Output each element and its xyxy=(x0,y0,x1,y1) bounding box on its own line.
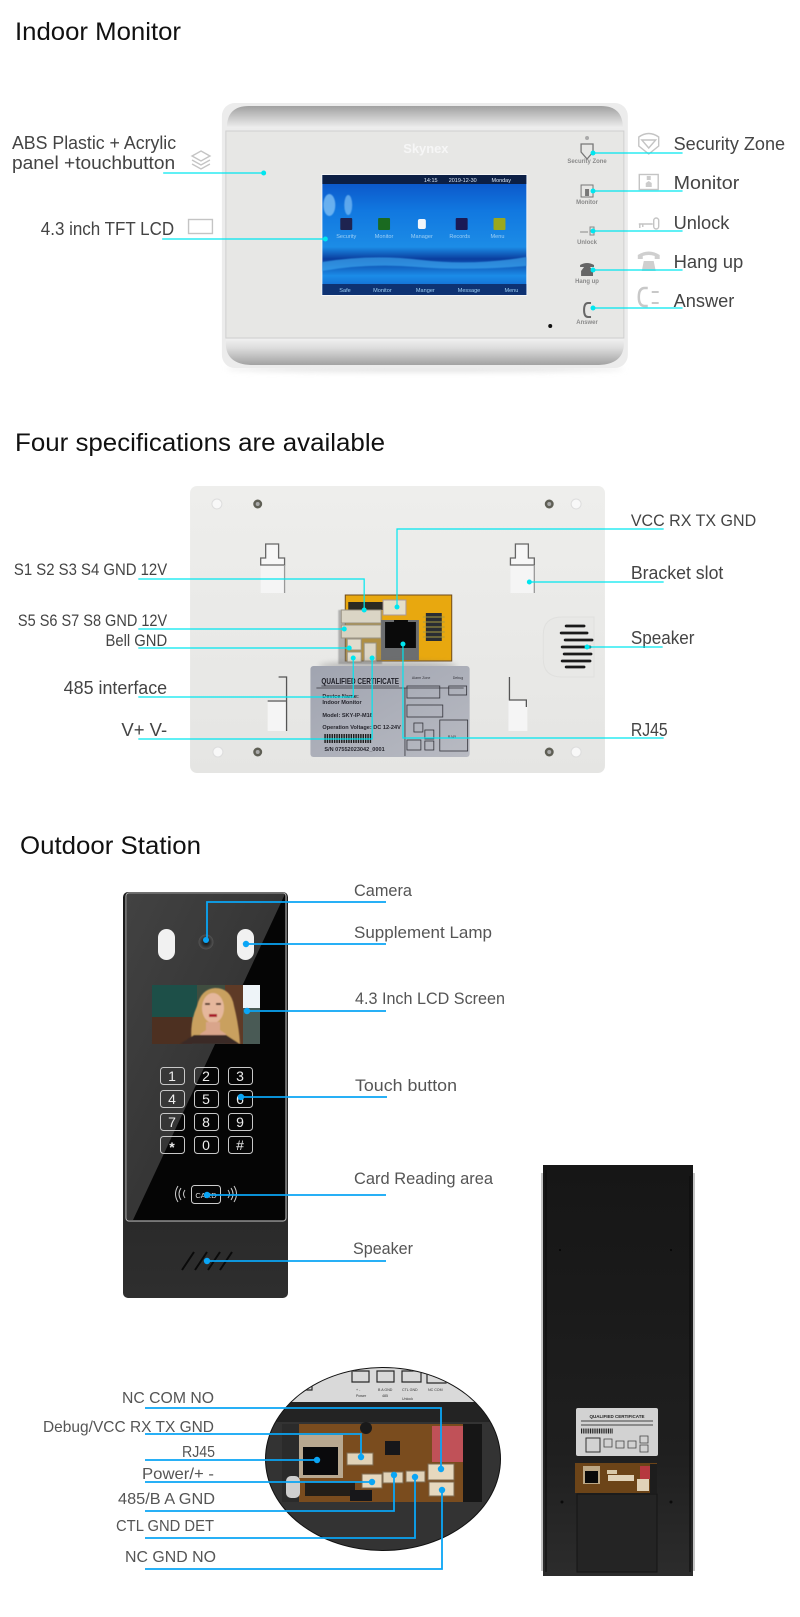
keypad: 7 xyxy=(168,1114,176,1130)
qualified certificate label: Operation Voltage: DC 12-24V xyxy=(322,725,401,731)
callout: NC COM NO xyxy=(122,1390,444,1472)
screws and bumps xyxy=(212,499,581,757)
rear recess xyxy=(577,1494,657,1572)
callout: Touch button: Touch button xyxy=(355,1077,457,1095)
touch buttons: Hang up xyxy=(575,279,599,285)
callout: Card Reading area xyxy=(204,1170,494,1198)
connector legend strip xyxy=(306,1370,447,1400)
connector legend strip: B A GND xyxy=(378,1388,393,1392)
qualified certificate label: S/N 07552023042_0001 xyxy=(324,747,385,753)
callout: Power xyxy=(142,1466,375,1485)
screen: home menu: Monday xyxy=(492,178,511,184)
callout: Hang up xyxy=(591,251,743,272)
callout: Security Zone xyxy=(591,133,785,156)
panel: outdoor station front xyxy=(123,892,288,1298)
qualified certificate label xyxy=(310,661,470,757)
callout: Monitor xyxy=(591,172,739,194)
connector legend strip: CTL GND xyxy=(402,1388,418,1392)
rear label xyxy=(576,1408,658,1456)
brand: Skynex: Skynex xyxy=(403,141,449,156)
callout: NC GND NO xyxy=(125,1487,445,1569)
callout: 485/B A GND: 485/B A GND xyxy=(118,1491,215,1508)
qualified certificate label: Indoor Monitor xyxy=(322,700,362,706)
screen: home menu: Menu xyxy=(504,288,518,294)
keypad: 6 xyxy=(236,1091,244,1107)
callout: Camera: Camera xyxy=(354,882,413,900)
callout: 4.3 Inch LCD Screen xyxy=(244,990,505,1014)
callout: Speaker: Speaker xyxy=(353,1240,413,1258)
keypad: 0 xyxy=(202,1137,210,1153)
PCB connector window xyxy=(338,595,452,664)
title: Outdoor Station: Outdoor Station xyxy=(20,832,201,860)
callout: Bell GND xyxy=(105,631,352,650)
callout: material: panel +touchbutton xyxy=(12,152,175,173)
qualified certificate label: Debug xyxy=(453,676,463,680)
callout: Camera xyxy=(203,882,413,943)
callout: S5 S6 S7 S8 GND 12V xyxy=(18,611,347,632)
qualified certificate label: QUALIFIED CERTIFICATE xyxy=(321,676,399,686)
speaker grille xyxy=(543,617,594,677)
panel: monitor rear xyxy=(190,486,605,773)
callout: Hang up: Hang up xyxy=(674,251,743,272)
callout: Bracket slot: Bracket slot xyxy=(631,562,723,583)
callout: VCC RX TX GND xyxy=(395,511,756,610)
screen: home menu: Manager xyxy=(411,234,433,240)
title: Indoor Monitor: Indoor Monitor xyxy=(15,18,181,46)
callout: Unlock xyxy=(591,212,730,234)
bracket slots xyxy=(261,544,534,731)
callout: 4.3 Inch LCD Screen: 4.3 Inch LCD Screen xyxy=(355,990,505,1008)
connector legend strip: NC COM xyxy=(428,1388,443,1392)
callout: Supplement Lamp xyxy=(243,924,492,947)
qualified certificate label: Alarm Zone xyxy=(412,676,430,680)
callout: material: ABS Plastic + Acrylic xyxy=(12,132,176,153)
callout: Unlock: Unlock xyxy=(674,212,730,233)
card reader xyxy=(176,1186,236,1204)
keypad: 9 xyxy=(236,1114,244,1130)
callout: LCD: 4.3 inch TFT LCD xyxy=(41,218,174,239)
connector legend strip: Power xyxy=(356,1394,367,1398)
screen: home menu: Menu xyxy=(491,234,504,240)
callout: 485/B A GND xyxy=(118,1472,397,1511)
callout: CTL GND DET: CTL GND DET xyxy=(116,1518,214,1535)
callout: VCC RX TX GND: VCC RX TX GND xyxy=(631,511,756,530)
LCD photo of a woman xyxy=(152,985,260,1044)
screen: home menu: Message xyxy=(458,288,480,294)
title: Four specifications: Four specifications are available xyxy=(15,429,385,457)
panel: indoor monitor front xyxy=(222,103,628,372)
callout: Speaker xyxy=(585,627,695,650)
callout: Answer xyxy=(591,288,734,311)
rear label: QUALIFIED CERTIFICATE xyxy=(590,1414,644,1419)
callout: Debug/VCC RX TX GND: Debug/VCC RX TX GND xyxy=(43,1419,214,1436)
screen: home menu: 2019-12-30 xyxy=(449,178,477,184)
callout: Touch button xyxy=(238,1077,457,1100)
screen: home menu: Monitor xyxy=(375,234,393,240)
callout: Speaker xyxy=(204,1240,413,1264)
connector legend strip: Unlock xyxy=(402,1397,413,1401)
keypad: 4 xyxy=(168,1091,176,1107)
keypad: 2 xyxy=(202,1068,210,1084)
callout: RJ45 xyxy=(400,642,668,740)
touch buttons: Monitor xyxy=(576,200,599,206)
touch buttons: Security Zone xyxy=(567,159,607,165)
touch buttons xyxy=(548,136,607,328)
panel: circuit board magnified lens xyxy=(262,1364,502,1554)
screen: home menu: Manger xyxy=(416,288,435,294)
camera and lamps xyxy=(158,929,254,960)
card reader: CARD xyxy=(195,1191,217,1200)
callout: Bell GND: Bell GND xyxy=(105,631,167,650)
callout: Monitor: Monitor xyxy=(674,172,739,193)
callout: material xyxy=(12,132,266,176)
keypad xyxy=(160,1068,252,1155)
callout: V+ V- xyxy=(121,656,375,740)
callout: CTL GND DET xyxy=(116,1474,418,1538)
callout: RJ45: RJ45 xyxy=(182,1444,215,1461)
qualified certificate label: Device Name: xyxy=(322,694,359,700)
callout: S1 S2 S3 S4 GND 12V xyxy=(14,560,367,612)
screen: home menu: Records xyxy=(449,234,470,240)
qualified certificate label: RJ45 xyxy=(448,735,456,739)
screen: home menu: Monitor xyxy=(373,288,392,294)
keypad: 1 xyxy=(168,1068,176,1084)
callout: Bracket slot xyxy=(527,562,723,584)
panel: outdoor station rear xyxy=(541,1165,695,1576)
callout: NC GND NO: NC GND NO xyxy=(125,1549,216,1566)
callout: NC COM NO: NC COM NO xyxy=(122,1390,214,1407)
callout: 485 interface: 485 interface xyxy=(64,677,167,698)
screen: home menu xyxy=(321,174,527,296)
callout: 485 interface xyxy=(64,656,356,698)
keypad: 8 xyxy=(202,1114,210,1130)
callout: Answer: Answer xyxy=(674,290,734,311)
screen: home menu: Safe xyxy=(339,288,351,294)
callout: S1 S2 S3 S4 GND 12V: S1 S2 S3 S4 GND 12V xyxy=(14,560,168,579)
callout: Card Reading area: Card Reading area xyxy=(354,1170,494,1188)
connector legend strip: 485 xyxy=(382,1394,388,1398)
callout: S5 S6 S7 S8 GND 12V: S5 S6 S7 S8 GND 12V xyxy=(18,611,168,630)
keypad: * xyxy=(169,1139,175,1155)
callout: Supplement Lamp: Supplement Lamp xyxy=(354,924,492,942)
callout: V+ V-: V+ V- xyxy=(121,719,167,740)
keypad: 5 xyxy=(202,1091,210,1107)
callout: RJ45 xyxy=(145,1444,320,1463)
screen: home menu: 14:15 xyxy=(424,178,438,184)
qualified certificate label: Model: SKY-IP-M16 xyxy=(322,713,373,719)
callout: Speaker: Speaker xyxy=(631,627,695,648)
touch buttons: Unlock xyxy=(577,240,598,246)
callout: Debug/VCC RX TX GND xyxy=(43,1419,364,1460)
callout: LCD xyxy=(41,218,328,242)
callout: Power: Power/+ - xyxy=(142,1466,214,1483)
callout: RJ45: RJ45 xyxy=(631,719,668,740)
screen: home menu: Security xyxy=(336,234,357,240)
keypad: # xyxy=(236,1137,244,1153)
touch buttons: Answer xyxy=(576,320,598,326)
callout: Security Zone: Security Zone xyxy=(674,133,785,154)
connector legend strip: + - xyxy=(356,1388,361,1392)
rear circuit board xyxy=(575,1463,657,1493)
keypad: 3 xyxy=(236,1068,244,1084)
